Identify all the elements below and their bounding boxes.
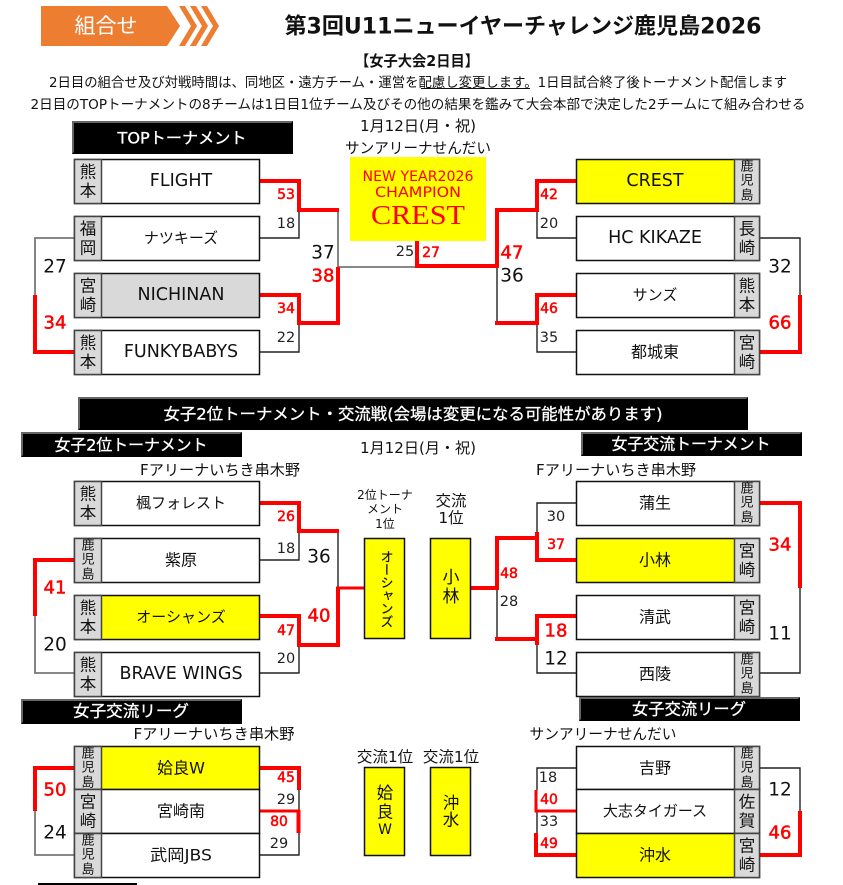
- team: CREST: [576, 160, 760, 204]
- team: 武岡JBS: 鹿: [81, 834, 95, 848]
- heading: second-place tournament and exchange: 女子2位トーナメント・交流戦(会場は変更になる可能性があります): [164, 404, 662, 424]
- scores: league right: [539, 770, 792, 852]
- team: HC KIKAZE: 長: [739, 220, 755, 238]
- bracket lines: second-place tournament: [35, 503, 365, 673]
- team: 姶良W: 島: [81, 776, 95, 790]
- scores: top tournament: 66: [769, 312, 791, 334]
- champion box: CREST: [371, 200, 466, 230]
- team: オーシャンズ: [74, 596, 260, 640]
- scores: top tournament: 36: [500, 266, 524, 286]
- winner box: オーシャンズ: [364, 538, 404, 638]
- team: 西陵: 島: [740, 682, 754, 696]
- team: 吉野: [576, 746, 760, 790]
- label: exchange winner right: 交流1位: [423, 748, 479, 766]
- heading: 女子交流リーグ left: [21, 699, 242, 724]
- team: FUNKYBABYS: 本: [80, 352, 97, 372]
- subtitle: 【女子大会2日目】: [355, 52, 479, 70]
- scores: league right: 40: [540, 792, 558, 808]
- team: FUNKYBABYS: [74, 330, 260, 374]
- team: HC KIKAZE: 崎: [739, 238, 755, 258]
- team: オーシャンズ: 熊: [80, 598, 96, 618]
- team: 清武: 清武: [639, 608, 671, 626]
- team: 清武: 宮: [739, 598, 755, 618]
- scores: top tournament: 35: [540, 330, 558, 346]
- scores: top tournament: 34: [44, 312, 66, 334]
- scores: exchange tournament: 28: [500, 594, 518, 610]
- banner: 組合せ: 組合せ: [74, 14, 138, 38]
- venue: top tournament: サンアリーナせんだい: [345, 139, 491, 157]
- scores: second-place tournament: 26: [277, 509, 295, 525]
- scores: league left: 45: [277, 770, 295, 786]
- label: second-place winner: メント: [367, 502, 403, 516]
- scores: top tournament: 20: [540, 216, 558, 232]
- bracket lines: league left: [35, 768, 300, 855]
- team: オーシャンズ: 本: [80, 618, 97, 636]
- label: second-place winner: 1位: [375, 517, 395, 531]
- heading: 女子交流トーナメント: 女子交流トーナメント: [612, 434, 770, 454]
- team: 吉野: 児: [740, 760, 754, 776]
- team: 小林: 宮: [739, 542, 755, 560]
- team: 大志タイガース: 大志タイガース: [603, 802, 707, 820]
- team: 姶良W: 児: [81, 760, 95, 776]
- winner box: 姶良W: [364, 768, 404, 856]
- label: second-place winner: 2位トーナ: [357, 488, 413, 502]
- team: サンズ: [576, 274, 760, 318]
- team: 清武: [576, 596, 760, 640]
- team: 西陵: 鹿: [740, 652, 754, 668]
- team: CREST: CREST: [626, 171, 684, 191]
- scores: league right: 49: [540, 836, 558, 852]
- team: FLIGHT: 本: [80, 182, 97, 200]
- team: 蒲生: 島: [740, 510, 754, 526]
- scores: league left: 80: [270, 814, 288, 830]
- winner box: 姶良W: 姶: [377, 784, 394, 802]
- scores: exchange tournament: 30: [547, 509, 565, 525]
- team: 蒲生: 蒲生: [639, 494, 671, 512]
- bracket lines: top tournament right: [417, 181, 800, 352]
- team: 小林: 崎: [739, 560, 755, 580]
- label: exchange winner: 1位: [438, 509, 464, 527]
- scores: top tournament: 42: [540, 187, 558, 203]
- scores: top tournament: 27: [43, 256, 67, 278]
- heading: TOP tournament: TOPトーナメント: [116, 128, 246, 148]
- heading: 女子2位トーナメント: 女子2位トーナメント: [54, 436, 208, 454]
- team: 都城東: 宮: [739, 334, 755, 352]
- team: 紫原: 児: [81, 552, 95, 568]
- venue: right: Fアリーナいちき串木野: [536, 461, 696, 479]
- venue: league left: Fアリーナいちき串木野: [134, 725, 294, 743]
- heading: 女子交流リーグ right: [579, 697, 800, 721]
- notice line 2: 2日目のTOPトーナメントの8チームは1日目1位チーム及びその他の結果を鑑みて大会本部で決定した2チームにて組み合わせる: [30, 96, 806, 113]
- team: 大志タイガース: [576, 790, 760, 834]
- label: exchange winner: [435, 492, 467, 527]
- team: 都城東: [576, 330, 760, 374]
- bracket lines: league right: [536, 768, 800, 855]
- notice line 1: 2日目の組合せ及び対戦時間は、同地区・遠方チーム・運営を配慮し変更します。1日目試合終了後トーナメント配信します: [49, 75, 787, 91]
- team: 武岡JBS: 児: [81, 848, 95, 862]
- scores: league right: 18: [539, 770, 557, 786]
- team: サンズ: 熊: [739, 276, 755, 296]
- winner box: 小林: 林: [442, 587, 460, 607]
- scores: top tournament: 18: [277, 216, 295, 232]
- heading: 女子交流トーナメント: [581, 432, 802, 456]
- scores: league right: 12: [768, 780, 792, 800]
- team: 楓フォレスト: 本: [80, 504, 97, 522]
- scores: exchange tournament: 18: [545, 620, 567, 642]
- scores: top tournament: 46: [540, 301, 558, 317]
- team: 蒲生: [576, 482, 760, 526]
- heading: 女子2位トーナメント: [21, 432, 242, 457]
- team: FUNKYBABYS: 熊: [80, 334, 96, 352]
- team: 都城東: 都城東: [631, 342, 679, 362]
- label: exchange winner: 交流: [435, 492, 467, 510]
- scores: second-place tournament: 20: [277, 651, 295, 667]
- team: 姶良W: [74, 746, 260, 790]
- venue: left: Fアリーナいちき串木野: [140, 461, 300, 479]
- team: FLIGHT: 熊: [80, 162, 96, 182]
- winner box: 沖水: 沖: [443, 794, 459, 812]
- team: 紫原: 鹿: [81, 538, 95, 554]
- team: 宮崎南: 宮崎南: [157, 802, 205, 820]
- heading: 女子交流リーグ right: 女子交流リーグ: [632, 700, 746, 718]
- team: HC KIKAZE: [576, 216, 760, 260]
- team: NICHINAN: NICHINAN: [138, 285, 224, 305]
- scores: top tournament: 53: [277, 187, 295, 203]
- champion box: [350, 157, 486, 241]
- scores: top tournament: 34: [277, 301, 295, 317]
- team: 紫原: [74, 538, 260, 582]
- team: NICHINAN: [74, 274, 260, 318]
- heading: 女子交流リーグ left: 女子交流リーグ: [73, 702, 189, 720]
- team: 武岡JBS: [74, 834, 260, 878]
- champion box: NEW YEAR2026: [362, 169, 474, 185]
- team: CREST: 鹿: [740, 160, 754, 174]
- scores: top tournament: 32: [768, 256, 792, 278]
- scores: league left: 24: [43, 822, 67, 844]
- team: BRAVE WINGS: BRAVE WINGS: [119, 664, 243, 684]
- team: 沖水: 宮: [739, 836, 755, 856]
- champion box: CHAMPION: [375, 185, 461, 201]
- scores: top tournament: [43, 187, 792, 346]
- scores: second-place tournament: 20: [43, 634, 67, 656]
- scores: exchange tournament: 37: [547, 537, 565, 553]
- team: 楓フォレスト: 熊: [80, 484, 96, 504]
- label: exchange winner left: 交流1位: [357, 748, 413, 766]
- scores: top tournament: 38: [312, 266, 334, 286]
- winner box: 沖水: [430, 768, 470, 856]
- scores: top tournament: 47: [501, 242, 523, 264]
- scores: league left: 29: [270, 836, 288, 852]
- team: ナツキーズ: 岡: [80, 238, 96, 258]
- scores: league right: 33: [540, 814, 558, 830]
- team: FUNKYBABYS: FUNKYBABYS: [124, 342, 238, 362]
- scores: league left: 29: [277, 792, 295, 808]
- team: 清武: 崎: [739, 618, 755, 636]
- banner: 組合せ: [41, 6, 219, 46]
- team: FLIGHT: [74, 160, 260, 204]
- scores: league right: 46: [769, 822, 791, 844]
- team: 吉野: 吉野: [639, 758, 671, 778]
- venue: league right: サンアリーナせんだい: [530, 725, 676, 743]
- team: サンズ: サンズ: [633, 286, 677, 304]
- bracket lines: top tournament left: [35, 181, 418, 352]
- team: 西陵: 児: [740, 666, 754, 682]
- team: BRAVE WINGS: [74, 652, 260, 696]
- winner box: 姶良W: 良: [377, 802, 393, 822]
- team: 紫原: 紫原: [165, 550, 197, 570]
- winner box: 沖水: 水: [443, 810, 460, 830]
- team: 蒲生: 鹿: [740, 482, 754, 496]
- team: 西陵: 西陵: [639, 664, 671, 684]
- team: 楓フォレスト: 楓フォレスト: [136, 494, 226, 512]
- scores: exchange tournament: 12: [544, 648, 568, 670]
- team: NICHINAN: 宮: [80, 276, 96, 296]
- team: BRAVE WINGS: 本: [80, 674, 97, 694]
- team: 都城東: 崎: [739, 352, 755, 372]
- bracket lines: exchange tournament: [469, 503, 800, 673]
- scores: top tournament: 27: [422, 245, 440, 261]
- scores: league left: 50: [44, 780, 66, 800]
- label: second-place winner: [357, 488, 413, 531]
- winner box: 小林: 小: [442, 568, 460, 588]
- team: ナツキーズ: 福: [80, 220, 96, 238]
- team: サンズ: 本: [739, 296, 756, 314]
- heading: TOP tournament: [72, 121, 293, 154]
- scores: second-place tournament: 47: [277, 623, 295, 639]
- date: second-place tournament: 1月12日(月・祝): [360, 439, 476, 457]
- team: 大志タイガース: 佐: [739, 792, 755, 812]
- team: 紫原: 島: [81, 568, 95, 582]
- team: 蒲生: 児: [740, 496, 754, 510]
- scores: top tournament: 22: [277, 330, 295, 346]
- team: 武岡JBS: 武岡JBS: [150, 846, 212, 864]
- team: BRAVE WINGS: 熊: [80, 656, 96, 674]
- team: CREST: 児: [740, 174, 754, 188]
- scores: second-place tournament: 40: [308, 606, 330, 626]
- team: FLIGHT: FLIGHT: [150, 171, 213, 191]
- team: 沖水: 崎: [739, 856, 755, 874]
- heading: second-place tournament and exchange: [78, 397, 748, 430]
- team: 吉野: 島: [740, 776, 754, 790]
- scores: second-place tournament: 36: [307, 546, 331, 568]
- team: 大志タイガース: 賀: [739, 812, 755, 830]
- team: 姶良W: 姶良W: [157, 758, 205, 778]
- scores: second-place tournament: 18: [277, 541, 295, 557]
- team: 楓フォレスト: [74, 482, 260, 526]
- title: 第3回U11ニューイヤーチャレンジ鹿児島2026: [284, 14, 762, 40]
- scores: exchange tournament: 34: [769, 534, 791, 556]
- team: オーシャンズ: オーシャンズ: [136, 608, 226, 626]
- team: 沖水: 沖水: [639, 846, 671, 864]
- team: 小林: [576, 538, 760, 582]
- team: 吉野: 鹿: [740, 746, 754, 762]
- team: 西陵: [576, 652, 760, 696]
- scores: top tournament: 37: [311, 242, 335, 264]
- team: ナツキーズ: ナツキーズ: [144, 229, 218, 247]
- winner box: 姶良W: W: [378, 822, 392, 838]
- scores: exchange tournament: [500, 509, 792, 670]
- team: ナツキーズ: [74, 216, 260, 260]
- scores: second-place tournament: [43, 509, 331, 667]
- scores: second-place tournament: 41: [44, 578, 66, 598]
- scores: exchange tournament: 48: [500, 566, 518, 582]
- team: 宮崎南: [74, 790, 260, 834]
- team: HC KIKAZE: HC KIKAZE: [608, 228, 702, 248]
- date: top tournament: 1月12日(月・祝): [360, 117, 476, 135]
- team: NICHINAN: 崎: [80, 296, 96, 314]
- winner box: オーシャンズ: オーシャンズ: [378, 550, 392, 628]
- scores: exchange tournament: 11: [768, 624, 792, 644]
- winner box: 小林: [430, 538, 470, 638]
- scores: league left: [43, 770, 295, 852]
- team: 宮崎南: 崎: [80, 812, 96, 830]
- team: 姶良W: 鹿: [81, 746, 95, 762]
- team: 沖水: [576, 834, 760, 878]
- team: 武岡JBS: 島: [81, 862, 95, 878]
- team: CREST: 島: [740, 188, 754, 204]
- scores: top tournament: 25: [396, 244, 414, 260]
- team: 宮崎南: 宮: [80, 792, 96, 812]
- team: 小林: 小林: [639, 550, 671, 570]
